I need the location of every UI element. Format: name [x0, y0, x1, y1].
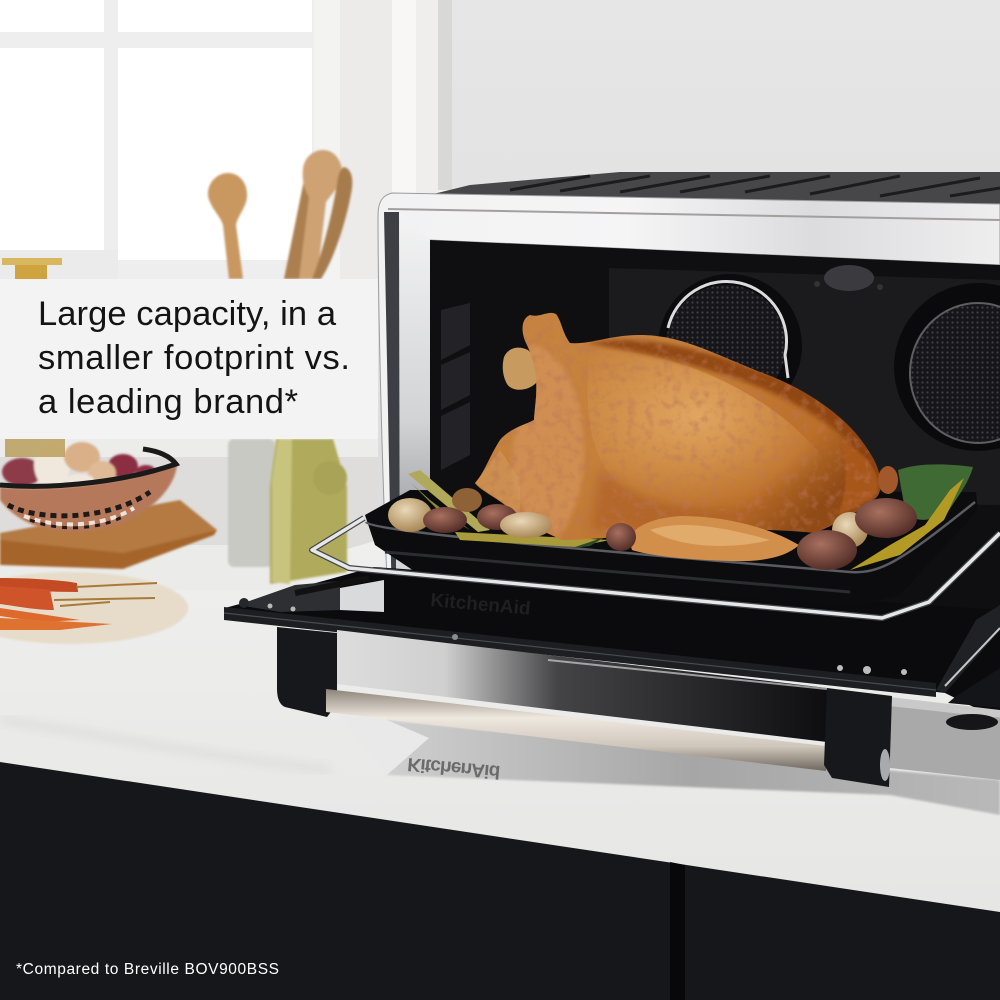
ceramic jar — [228, 439, 275, 567]
open oven door: KitchenAid — [430, 590, 531, 620]
chicken shading — [475, 316, 879, 540]
handle bar — [326, 689, 826, 771]
wooden spoons — [208, 150, 352, 279]
right fan — [894, 283, 1000, 451]
wire rack — [312, 518, 1000, 618]
heading: a leading brand* — [38, 383, 298, 421]
gold vase base — [5, 439, 65, 457]
greens in pan — [408, 464, 973, 570]
cabinet — [0, 762, 1000, 1000]
gold vase top — [2, 258, 62, 279]
footnote: *Compared to Breville BOV900BSS — [16, 961, 279, 978]
bowl with shallots — [0, 441, 177, 532]
plate of carrots — [0, 572, 188, 644]
heading: smaller footprint vs. — [38, 339, 350, 377]
chicken foot — [503, 348, 537, 390]
heading: Large capacity, in a — [38, 295, 337, 333]
oven reflection on marble: KitchenAid — [407, 753, 501, 782]
left handle bracket — [277, 627, 337, 717]
oven chrome frame — [378, 193, 1000, 600]
oven body — [378, 172, 1000, 650]
chicken wing — [629, 516, 799, 561]
chrome side post — [384, 212, 431, 612]
window — [0, 0, 320, 280]
oven reflection on marble — [338, 715, 1000, 815]
roasting pan — [365, 490, 978, 606]
olive oil bottle — [270, 439, 347, 584]
window trim — [314, 0, 452, 280]
right handle bracket — [824, 688, 892, 787]
chrome band right of door — [890, 697, 1000, 780]
text panel — [0, 279, 378, 439]
oven foot — [465, 658, 517, 676]
oven door handle — [277, 627, 892, 787]
lower wall behind counter — [0, 439, 378, 599]
oven top vent — [425, 172, 1000, 205]
open oven door — [224, 567, 1000, 720]
sensor — [814, 265, 883, 291]
oven interior — [430, 240, 1000, 650]
handle end cap — [880, 749, 890, 781]
chicken body — [475, 313, 881, 540]
roasted potatoes — [388, 466, 917, 570]
countertop — [0, 540, 1000, 912]
background wall — [0, 0, 1000, 600]
glass under door — [337, 630, 827, 742]
chicken — [470, 305, 890, 561]
left fan — [658, 274, 802, 418]
cutting board — [0, 500, 217, 569]
